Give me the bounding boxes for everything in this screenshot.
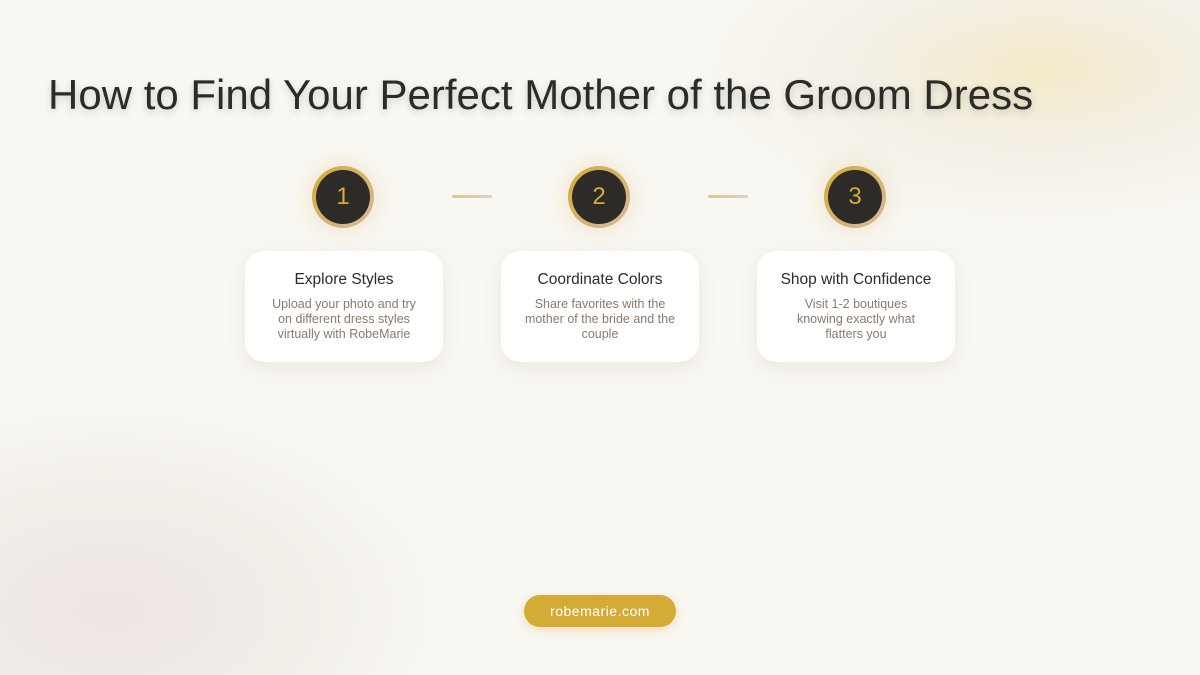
card: shop with confidence: Shop with Confidence: [781, 271, 931, 288]
card: shop with confidence: Visit 1-2 boutiques knowing exactly what flatters you: [797, 297, 915, 341]
step 3 number: [824, 166, 886, 228]
card: coordinate colors: Share favorites with the mother of the bride and the couple: [525, 297, 675, 341]
step 1 number: 1: [336, 183, 350, 210]
card: shop with confidence: [757, 251, 955, 362]
connector 1: [452, 195, 492, 198]
card: explore styles: Explore Styles: [294, 271, 394, 288]
title: How to Find Your Perfect Mother of the Groom Dress: [48, 71, 1033, 118]
step 2 number: [568, 166, 630, 228]
connector 2: [708, 195, 748, 198]
card: explore styles: Upload your photo and try on different dress styles virtually with RobeMarie: [272, 297, 416, 341]
step 2 number: 2: [592, 183, 606, 210]
card: coordinate colors: [501, 251, 699, 362]
step 3 number: 3: [848, 183, 862, 210]
card: coordinate colors: Coordinate Colors: [538, 271, 662, 288]
card: explore styles: [245, 251, 443, 362]
button: website: robemarie.com: [550, 603, 650, 619]
button: website: [524, 595, 676, 627]
step 1 number: [312, 166, 374, 228]
